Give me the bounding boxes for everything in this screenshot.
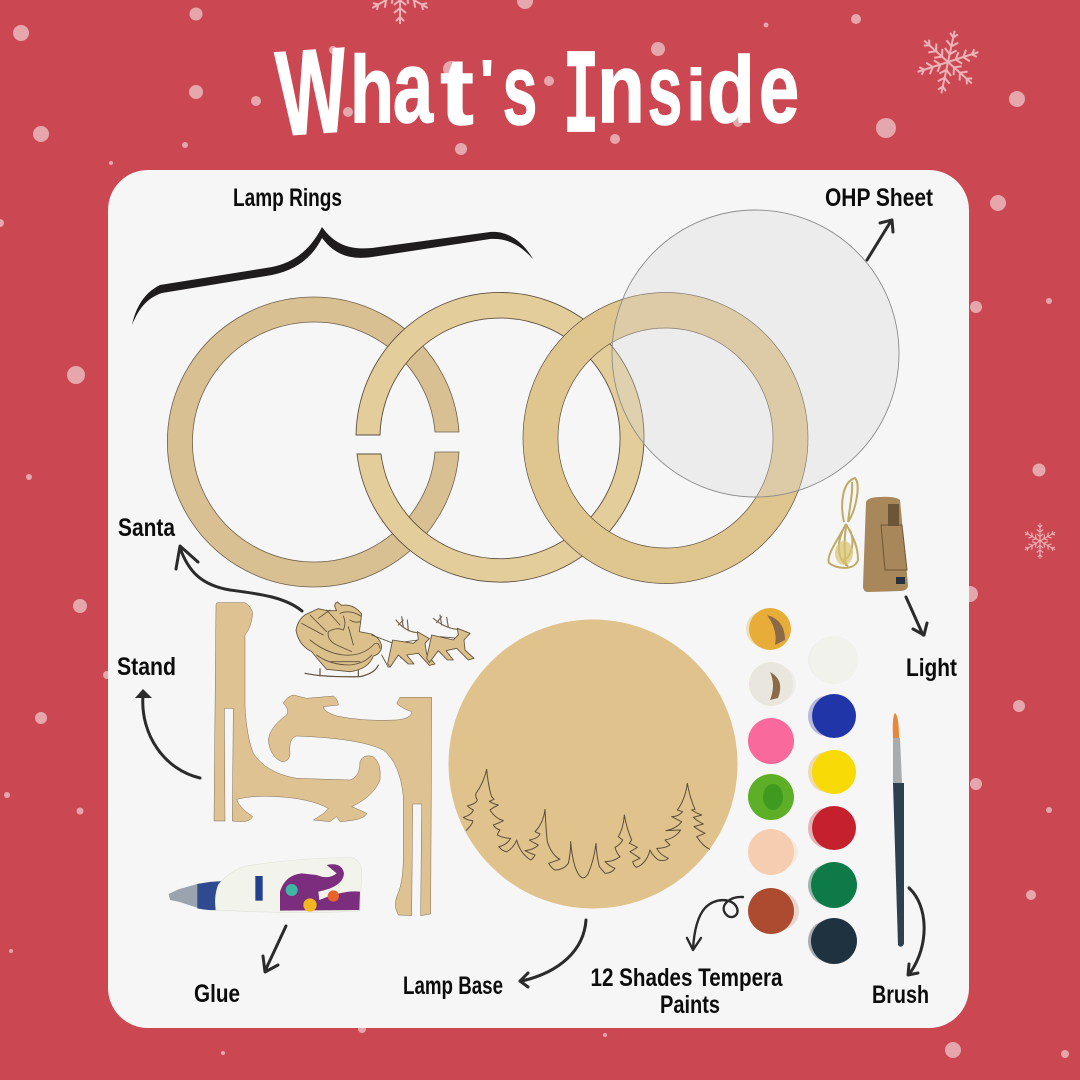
brace over lamp rings (132, 227, 533, 325)
title: ' (480, 48, 494, 115)
label: Santa: Santa (118, 514, 176, 542)
sleigh and santa silhouette (296, 602, 382, 672)
antlers 1 (396, 617, 417, 633)
battery cover (881, 525, 907, 570)
lamp ring 2 (356, 292, 644, 582)
nozzle (169, 883, 199, 908)
title: i (686, 56, 706, 136)
paint details: gold and silver lids (767, 615, 785, 700)
right column (810, 636, 858, 964)
green lid detail (763, 784, 783, 810)
antlers 2 (433, 615, 457, 629)
trees outline (463, 769, 710, 878)
title: d (707, 38, 755, 143)
cork notch (888, 504, 899, 526)
reins (372, 635, 458, 667)
reindeer 2 (427, 628, 474, 663)
snowflake top (369, 0, 431, 24)
label: tempera paints: 12 Shades Tempera (591, 964, 783, 992)
panel: contents (108, 170, 969, 1028)
title: s (503, 34, 537, 146)
cork body (863, 497, 908, 592)
title: n (597, 33, 645, 143)
title: a (393, 30, 434, 144)
label: OHP sheet: OHP Sheet (825, 184, 934, 212)
flower teal (286, 884, 298, 896)
sleigh runners (305, 665, 378, 677)
santa sleigh and reindeer (296, 602, 474, 677)
paint brush (893, 713, 904, 947)
title: W (273, 24, 352, 162)
ferrule (893, 738, 902, 783)
glue bottle (169, 858, 362, 913)
left column side lobes (746, 611, 799, 931)
label: lamp rings: Lamp Rings (233, 184, 342, 212)
arrow: lamp base (520, 920, 586, 987)
label: lamp base: Lamp Base (403, 972, 503, 1000)
label: tempera paints: Paints (660, 991, 720, 1019)
flower yellow (303, 898, 317, 912)
wire (829, 478, 858, 568)
snowflake right (1023, 523, 1057, 559)
arrow: paints loop (687, 897, 743, 950)
arrow: light (906, 597, 927, 635)
stand piece 1 (214, 603, 380, 822)
title: e (759, 34, 799, 144)
wire bundle (835, 541, 853, 565)
light: wire and cork (829, 478, 908, 592)
flower orange (328, 890, 339, 902)
stand pieces (214, 603, 432, 916)
cap (197, 881, 225, 910)
snowflake top right (911, 24, 985, 100)
right column side lobes (808, 640, 844, 961)
arrow: stand (143, 695, 200, 778)
left column (748, 608, 794, 934)
title: s (648, 34, 682, 146)
label: brush: Brush (872, 981, 929, 1009)
arrow: Santa (176, 546, 302, 611)
elephant label (280, 864, 360, 911)
title: h (350, 36, 394, 142)
arrow: OHP sheet (867, 220, 893, 260)
arrow head: stand (135, 689, 152, 698)
label: light: Light (906, 654, 958, 682)
handle (893, 783, 904, 947)
brush tip (893, 713, 899, 738)
label: stand: Stand (117, 653, 176, 681)
reindeer 1 (388, 632, 435, 667)
label: glue: Glue (194, 980, 240, 1008)
lamp base (448, 620, 738, 908)
bottle body (215, 858, 362, 913)
lamp ring 1 (167, 297, 459, 587)
arrow: brush (908, 888, 924, 975)
title (273, 24, 799, 168)
paint pots (746, 608, 858, 964)
title: I (563, 32, 599, 168)
stand piece 2 (268, 695, 432, 916)
OHP sheet (612, 210, 899, 497)
cork switch (896, 577, 905, 584)
lamp ring 3 (523, 292, 808, 584)
arrow: glue (263, 926, 286, 972)
brand mark (255, 876, 263, 901)
title: t (440, 38, 474, 144)
santa detail (302, 610, 380, 665)
